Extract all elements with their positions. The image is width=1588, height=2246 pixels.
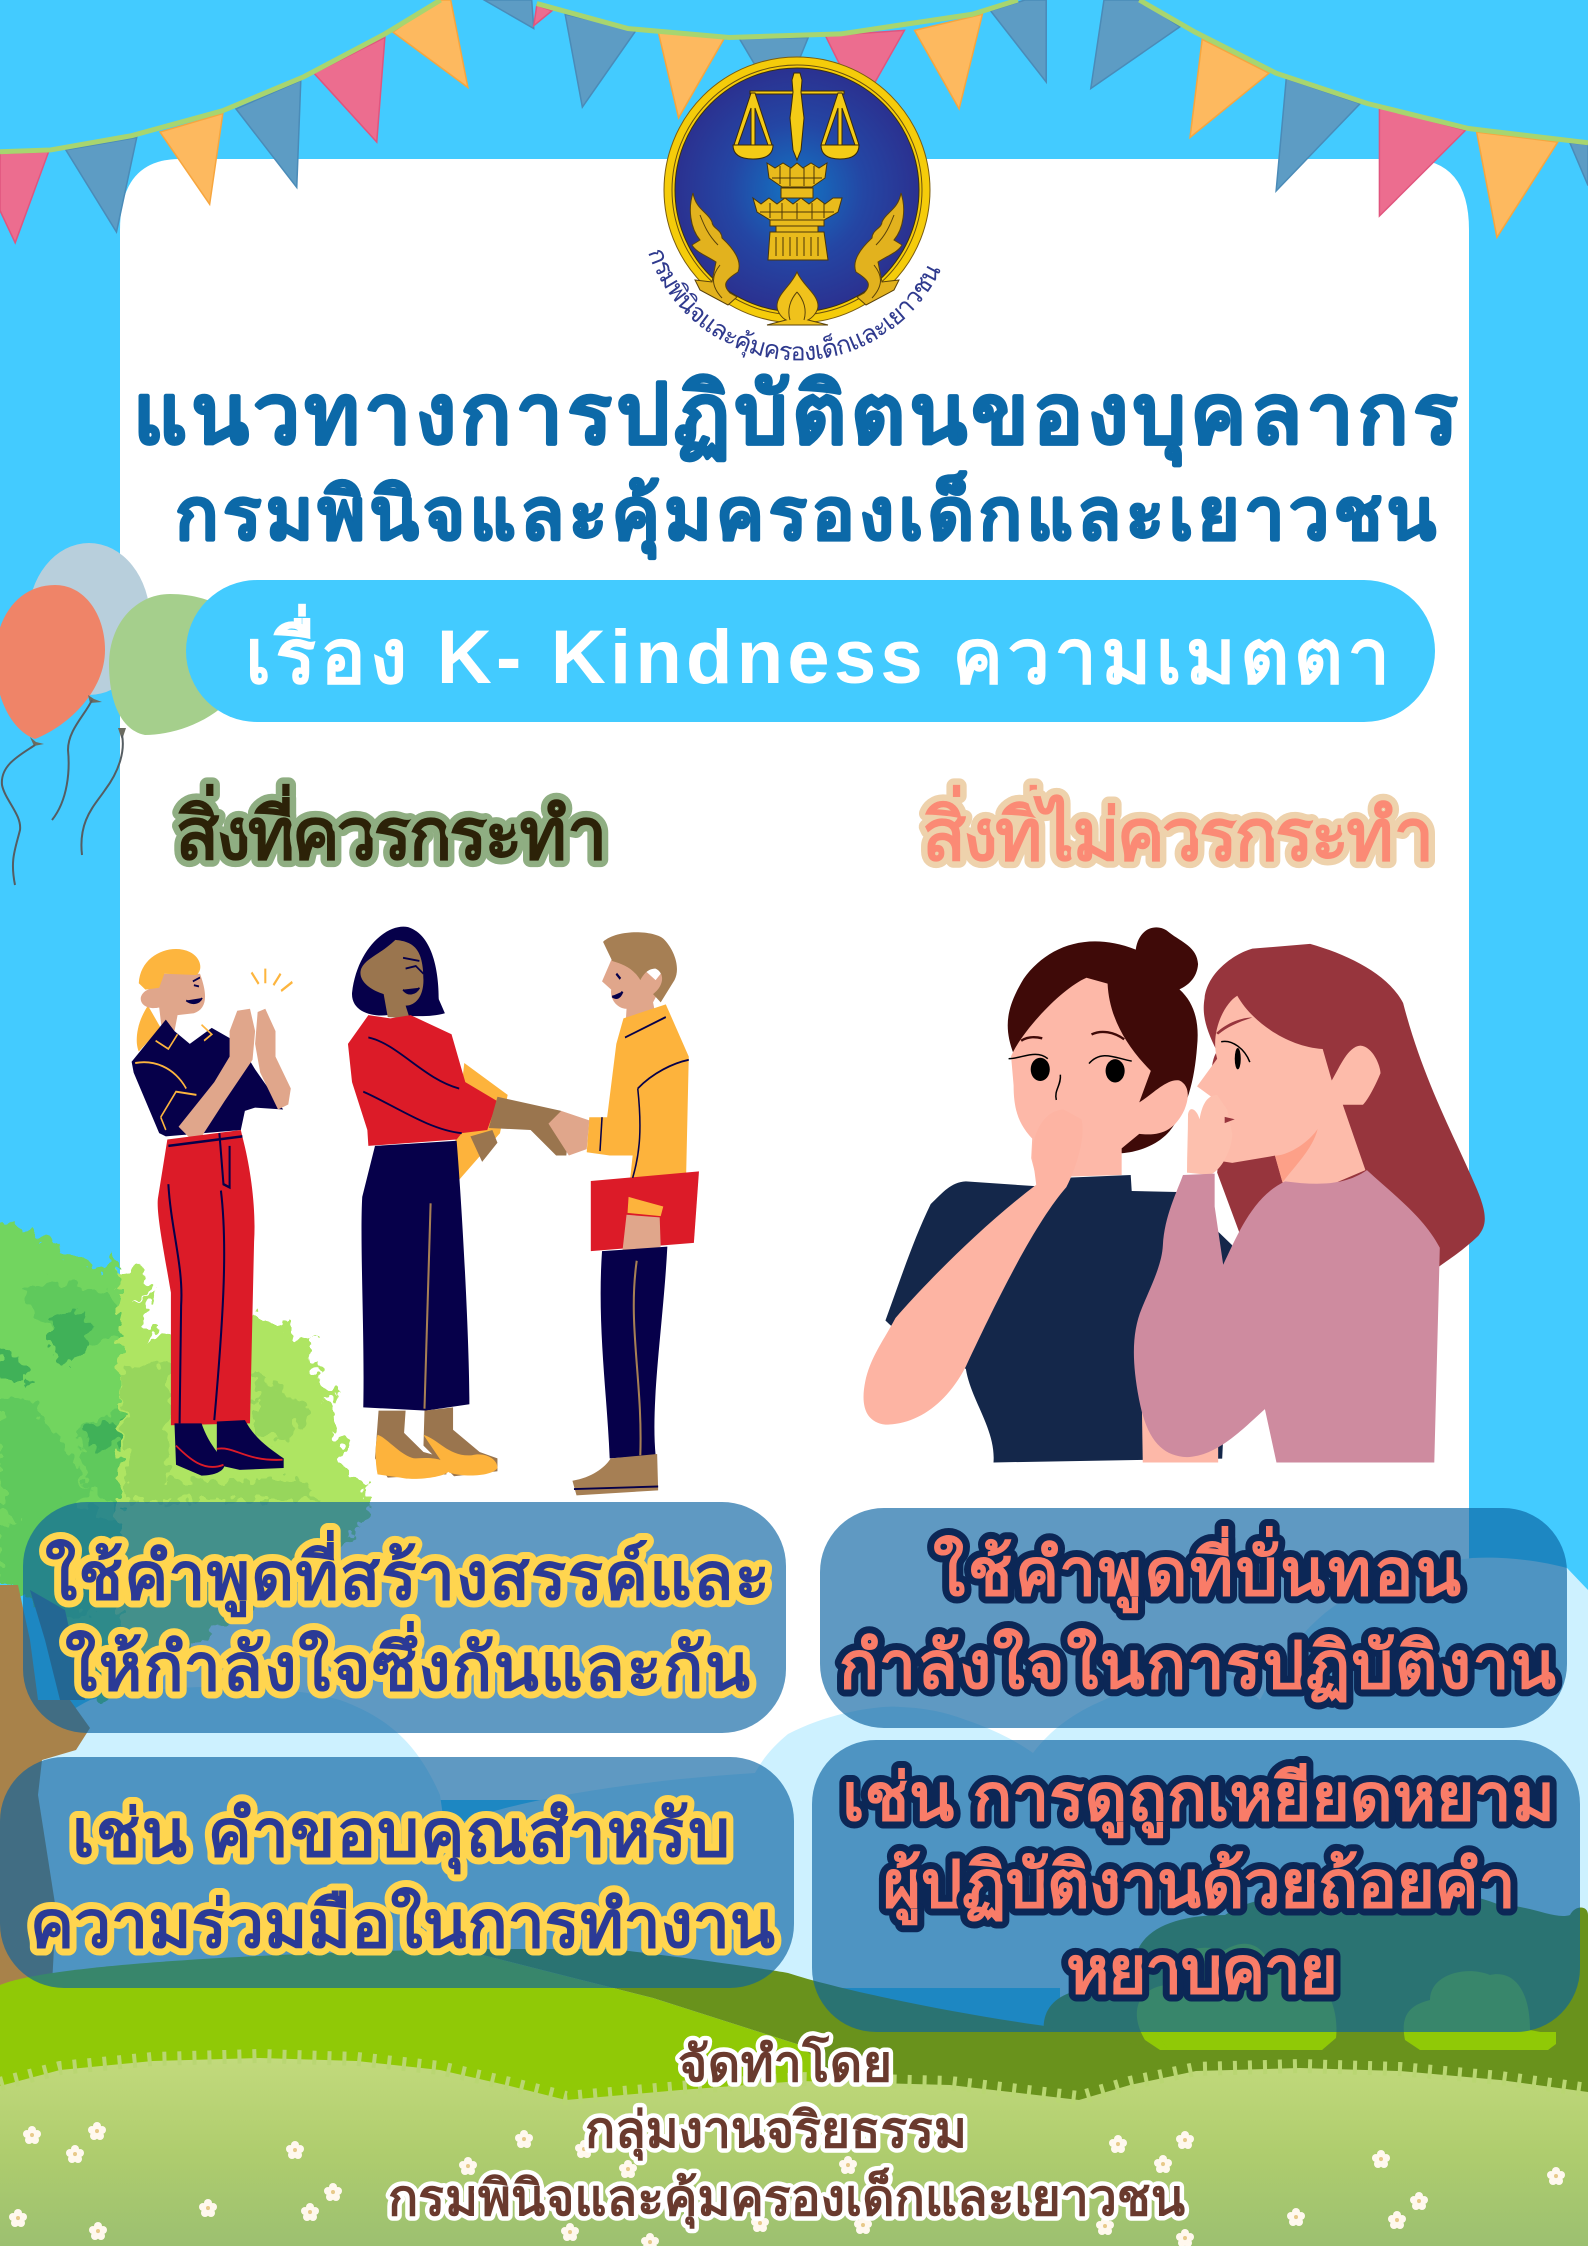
- figure: listening woman: [864, 927, 1232, 1462]
- do statement text: ให้กำลังใจซึ่งกันและกัน: [65, 1620, 750, 1704]
- bunting strings: [0, 0, 1588, 152]
- logo caption on arc: กรมพินิจและคุ้มครองเด็กและเยาวชน: [648, 250, 940, 360]
- do not statement text: กำลังใจในการปฏิบัติงาน: [839, 1626, 1556, 1703]
- title line 1: แนวทางการปฏิบัติตนของบุคลากร: [133, 367, 1458, 467]
- do not example text: เช่น การดูถูกเหยียดหยาม: [842, 1760, 1555, 1839]
- figure: man in yellow: [548, 932, 699, 1495]
- tree foliage: [0, 1222, 372, 1705]
- do not statement text: [839, 1525, 1556, 1703]
- do not statement text: ใช้คำพูดที่บั่นทอน: [933, 1525, 1461, 1614]
- near bushes: [1137, 1944, 1556, 2050]
- icon: pedestal: [753, 163, 842, 260]
- sky strip behind hills: [812, 1988, 1060, 2040]
- do not example text: ผู้ปฏิบัติงานด้วยถ้อยคำ: [883, 1847, 1516, 1926]
- meadow: [0, 2056, 1588, 2246]
- bunting flags: [0, 0, 1588, 243]
- clouds: [0, 1558, 1588, 2100]
- illustration: two women whispering: [864, 927, 1485, 1462]
- logo seal: [648, 56, 940, 360]
- white content panel: [120, 159, 1469, 1800]
- bunting: [0, 0, 1588, 243]
- flowers: [9, 2122, 1565, 2246]
- balloon strings: [2, 700, 123, 885]
- do not example text: [842, 1760, 1555, 2007]
- credits: จัดทำโดย: [678, 2034, 892, 2092]
- balloon: grey blue: [28, 543, 150, 695]
- credits: [388, 2034, 1185, 2229]
- figure: whispering woman: [1134, 944, 1485, 1462]
- hills: [0, 1949, 1588, 2150]
- box: do example: [0, 1757, 794, 1988]
- illustration: colleagues applauding and shaking hands: [132, 927, 699, 1495]
- do example text: ความร่วมมือในการทำงาน: [30, 1885, 775, 1961]
- title line 2: กรมพินิจและคุ้มครองเด็กและเยาวชน: [175, 471, 1436, 560]
- figure: clapping woman: [132, 949, 292, 1476]
- balloons: [0, 543, 230, 885]
- balloon: green: [109, 594, 230, 735]
- title: [133, 367, 1458, 560]
- far bushes: [1040, 1888, 1588, 2100]
- icon: right naga: [855, 193, 904, 305]
- do example text: [30, 1796, 775, 1961]
- heading: do: สิ่งที่ควรกระทำ: [175, 783, 607, 875]
- heading: do not: สิ่งที่ไม่ควรกระทำ: [922, 784, 1434, 876]
- do not example text: หยาบคาย: [1066, 1933, 1338, 2007]
- balloon: coral: [0, 585, 105, 739]
- figure: woman in red: [348, 927, 569, 1479]
- subtitle pill: [186, 580, 1435, 722]
- credits: กลุ่มงานจริยธรรม: [585, 2102, 967, 2161]
- do statement text: ใช้คำพูดที่สร้างสรรค์และ: [45, 1529, 770, 1618]
- box: do not statement: [820, 1508, 1567, 1728]
- box: do not example: [812, 1740, 1580, 2032]
- subtitle text: เรื่อง K- Kindness ความเมตตา: [245, 603, 1390, 700]
- icon: left naga: [690, 193, 739, 305]
- do example text: เช่น คำขอบคุณสำหรับ: [72, 1796, 730, 1875]
- tree trunk: [0, 1585, 90, 1985]
- icon: lotus: [767, 272, 828, 325]
- box: do statement: [23, 1502, 786, 1733]
- face details: [186, 978, 202, 1003]
- do statement text: [45, 1529, 770, 1704]
- balloon knots: [30, 695, 126, 746]
- icon: scales: [733, 73, 859, 160]
- credits: กรมพินิจและคุ้มครองเด็กและเยาวชน: [388, 2167, 1185, 2229]
